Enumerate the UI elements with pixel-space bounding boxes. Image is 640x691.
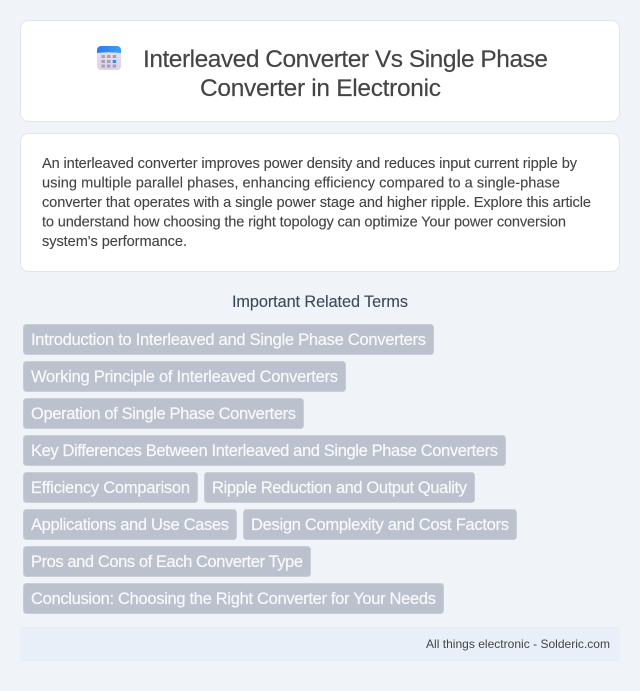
heading: related terms: Important Related Terms [232,293,408,311]
title: Converter in Electronic [200,75,441,102]
text block: introduction: An interleaved converter improves power density and reduces input current ripple by [42,156,578,172]
footer: All things electronic - Solderic.com [426,637,610,651]
panel: introduction [20,134,620,272]
tag: applications: Applications and Use Cases [31,516,229,534]
tag: pros and cons: Pros and Cons of Each Converter Type [31,553,303,571]
text block: introduction [42,156,591,250]
tag: operation [24,398,304,428]
tag: design complexity [244,510,516,540]
tag: working principle: Working Principle of Interleaved Converters [31,368,338,386]
related terms tags [24,324,516,614]
tag: conclusion [24,584,444,614]
tag: ripple reduction: Ripple Reduction and Output Quality [212,479,468,497]
text block: introduction: to understand how choosing the right topology can optimize Your power conversion [42,214,566,230]
footer [20,627,620,661]
title [143,46,548,102]
tag: efficiency: Efficiency Comparison [31,479,190,497]
text block: introduction: converter that operates with a single power stage and higher ripple. Explore this article [42,195,591,211]
tag: introduction: Introduction to Interleaved and Single Phase Converters [31,331,426,349]
tag: introduction [24,324,434,354]
tag: key differences: Key Differences Between Interleaved and Single Phase Converters [31,442,498,460]
panel: title card [20,20,620,122]
tag: design complexity: Design Complexity and Cost Factors [251,516,509,534]
tag: working principle [24,362,346,392]
tag: applications [24,510,236,540]
tag: operation: Operation of Single Phase Converters [31,405,296,423]
title: Interleaved Converter Vs Single Phase [143,46,548,73]
tag: key differences [24,436,506,466]
text block: introduction: using multiple parallel phases, enhancing efficiency compared to a single-phase [42,176,560,192]
tag: efficiency [24,472,198,502]
tag: conclusion: Conclusion: Choosing the Right Converter for Your Needs [31,590,436,608]
text block: introduction: system's performance. [42,234,187,250]
tag: ripple reduction [204,472,474,502]
icon: calendar [97,46,121,70]
tag: pros and cons [24,546,310,576]
